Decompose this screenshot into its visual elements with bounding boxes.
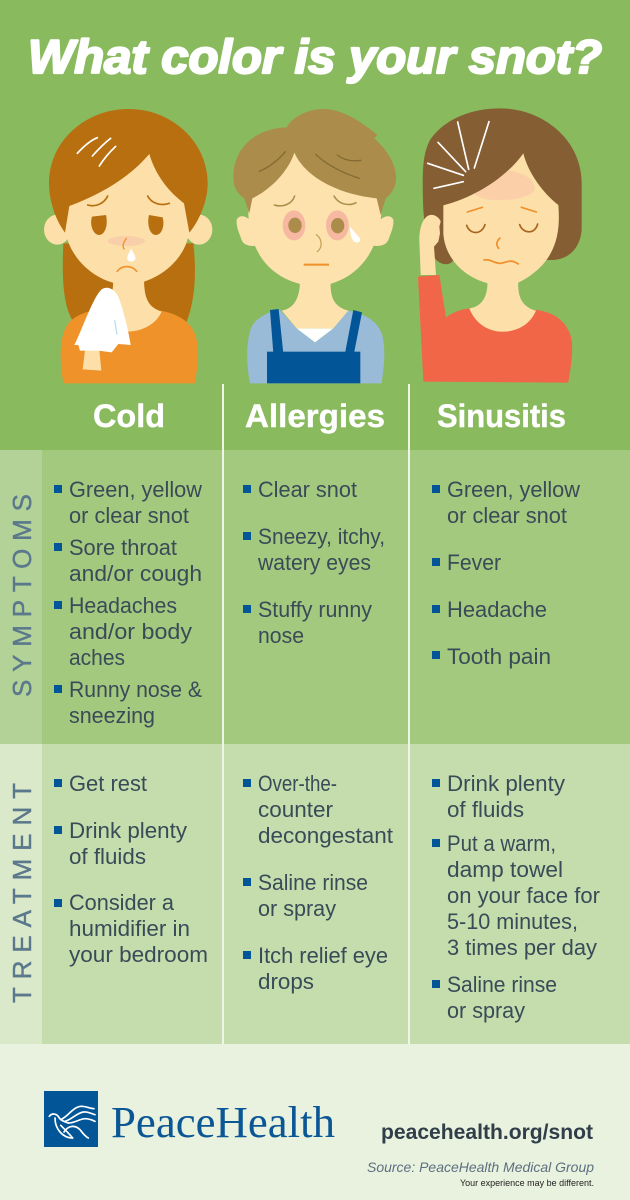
list: allergies treatment: Itch relief eye xyxy=(258,943,388,968)
list: cold treatment: Drink plenty xyxy=(69,818,187,843)
list: sinusitis treatment xyxy=(432,771,600,1023)
column headings xyxy=(93,398,566,434)
panel: symptoms row xyxy=(0,450,630,744)
panel: footer xyxy=(0,1044,630,1200)
list: allergies treatment: counter xyxy=(258,797,333,822)
list: cold symptoms: and/or body xyxy=(69,619,192,644)
list: allergies symptoms xyxy=(243,477,385,648)
list: allergies symptoms: Sneezy, itchy, xyxy=(258,524,385,549)
list: allergies treatment: or spray xyxy=(258,896,336,921)
disclaimer: Your experience may be different. xyxy=(460,1178,594,1189)
list: sinusitis symptoms: Tooth pain xyxy=(447,644,551,669)
list: allergies symptoms: watery eyes xyxy=(257,550,371,575)
list: sinusitis treatment: 5-10 minutes, xyxy=(447,909,578,934)
list: cold symptoms: sneezing xyxy=(69,703,155,728)
list: sinusitis treatment: Drink plenty xyxy=(447,771,565,796)
list: sinusitis symptoms: Green, yellow xyxy=(447,477,580,502)
list: cold symptoms: and/or cough xyxy=(69,561,202,586)
illustration: girl with a cold xyxy=(44,109,212,383)
column headings: Sinusitis xyxy=(437,398,566,434)
list: sinusitis symptoms: Headache xyxy=(447,597,547,622)
panel: header background xyxy=(0,0,630,450)
icon: PeaceHealth dove logo xyxy=(44,1091,98,1147)
list: sinusitis treatment: on your face for xyxy=(447,883,600,908)
list: cold treatment: humidifier in xyxy=(69,916,190,941)
list: sinusitis symptoms: or clear snot xyxy=(447,503,567,528)
list: sinusitis treatment: of fluids xyxy=(447,797,524,822)
list: cold treatment: your bedroom xyxy=(69,942,208,967)
list: cold treatment: Get rest xyxy=(69,771,147,796)
list: cold symptoms: Sore throat xyxy=(69,535,177,560)
panel: treatment row xyxy=(0,744,630,1044)
list: cold symptoms: aches xyxy=(69,645,125,670)
list: sinusitis treatment: or spray xyxy=(447,998,525,1023)
title: What color is your snot? xyxy=(28,30,602,83)
illustration: woman with sinusitis xyxy=(418,108,582,383)
column headings: Cold xyxy=(93,398,165,434)
website url: peacehealth.org/snot xyxy=(381,1121,593,1144)
logo wordmark: PeaceHealth xyxy=(111,1098,335,1147)
list: allergies treatment: drops xyxy=(258,969,314,994)
list: cold symptoms xyxy=(54,477,202,728)
list: allergies symptoms: Clear snot xyxy=(258,477,357,502)
list: cold treatment: Consider a xyxy=(69,890,175,915)
list: cold treatment xyxy=(54,771,208,967)
list: cold treatment: of fluids xyxy=(69,844,146,869)
list: sinusitis symptoms: Fever xyxy=(447,550,501,575)
list: allergies treatment xyxy=(243,771,393,994)
source note: Source: PeaceHealth Medical Group xyxy=(367,1159,594,1175)
list: allergies treatment: decongestant xyxy=(258,823,393,848)
list: sinusitis treatment: Saline rinse xyxy=(447,972,557,997)
list: sinusitis treatment: 3 times per day xyxy=(447,935,597,960)
list: cold symptoms: Green, yellow xyxy=(69,477,202,502)
list: sinusitis symptoms xyxy=(432,477,580,669)
list: cold symptoms: Headaches xyxy=(69,593,177,618)
list: allergies treatment: Saline rinse xyxy=(258,870,368,895)
list: sinusitis treatment: Put a warm, xyxy=(447,831,556,856)
label: treatment: TREATMENT xyxy=(7,783,37,1003)
list: allergies symptoms: nose xyxy=(258,623,304,648)
list: cold symptoms: Runny nose & xyxy=(69,677,202,702)
list: allergies treatment: Over-the- xyxy=(258,771,337,796)
list: allergies symptoms: Stuffy runny xyxy=(258,597,372,622)
label: symptoms: SYMPTOMS xyxy=(7,494,37,697)
column headings: Allergies xyxy=(245,398,385,434)
list: cold symptoms: or clear snot xyxy=(69,503,189,528)
list: sinusitis treatment: damp towel xyxy=(447,857,563,882)
illustration: boy with allergies xyxy=(233,109,396,383)
